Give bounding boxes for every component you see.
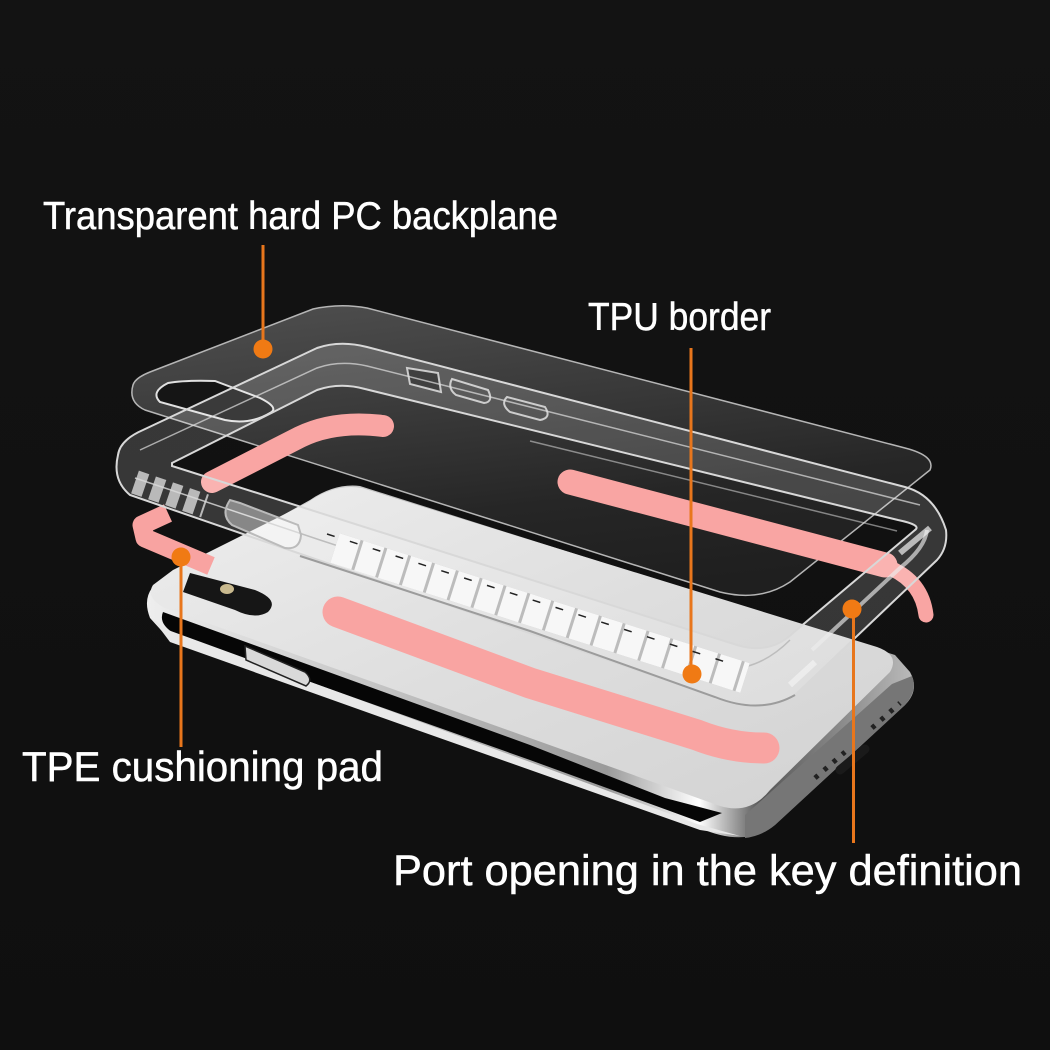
right pink pad [570,482,926,615]
plate body [132,306,931,595]
volume button opening [225,500,301,548]
charging port [840,749,865,770]
plate ports [407,368,548,420]
diamond pad strip base [335,548,745,678]
label: TPU border: TPU border [588,296,771,339]
phone side button [245,646,310,686]
right corner openings [812,530,927,650]
label: port opening: Port opening in the key definition [393,847,1022,895]
port holes [815,703,900,778]
callout: port opening [842,600,862,843]
label: TPE cushioning pad: TPE cushioning pad [22,743,383,790]
callout: TPU border [682,348,702,684]
phone [147,486,914,838]
frame inner bottom curve [530,534,737,645]
upper pink pad [212,424,383,482]
transparent PC backplane [132,306,931,595]
phone white edge [152,618,740,836]
diamond strip top line [327,534,735,665]
TPU frame [116,344,946,706]
label: backplane: Transparent hard PC backplane [43,195,558,238]
corner cells left [135,482,205,506]
frame second rail [530,441,897,531]
right corner highlight [790,528,930,685]
phone dark side stripe [162,612,722,822]
callout: TPE pad [172,548,190,747]
frame lower outline [300,556,795,706]
frame inner line [140,363,920,505]
phone white back [151,487,893,808]
callout: backplane [254,245,272,358]
diamond pad strip [335,548,745,678]
lower pink pad [338,612,764,748]
left pink pad [142,513,211,566]
phone chrome body [147,486,914,837]
phone port side [745,676,914,838]
camera flash [220,584,234,594]
camera opening [156,381,273,421]
camera bump [183,573,272,616]
frame body [116,344,946,706]
frame lower rim [135,478,790,669]
